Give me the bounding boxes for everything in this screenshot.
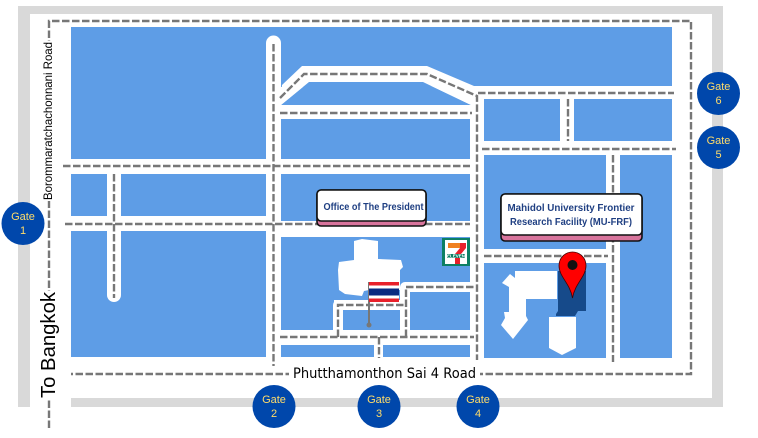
gate 3 [358,385,400,428]
label: Mahidol University Frontier Research Facility: Mahidol University Frontier [508,203,635,214]
gate 6 [697,72,740,115]
road label: Borommaratchachonnani Road: Borommaratchachonnani Road [41,42,55,200]
research facility buildings [501,271,586,355]
gate 5: Gate [707,135,730,147]
icon: 7-Eleven: ELEVEN [447,254,465,258]
gate 4 [456,385,500,428]
gate 2: Gate [262,394,286,406]
icon: location pin [559,252,586,298]
gate 6: Gate [707,81,730,93]
gate 1: 1 [20,225,26,237]
label: Office of The President: Office of The President [324,202,424,213]
label: Mahidol University Frontier Research Facility [501,194,642,241]
road label: Phutthamonthon Sai 4 Road: Phutthamonthon Sai 4 Road [293,366,476,382]
icon: Thai flag [366,282,399,328]
gate 4: Gate [466,394,490,406]
gate 3: Gate [367,394,391,406]
dashed roads [49,21,691,428]
campus blocks [71,27,672,358]
gate 1: Gate [11,211,35,223]
gate 2: 2 [271,408,277,420]
gate 2 [252,385,296,428]
gate 5: 5 [715,149,722,161]
office building footprint [338,239,403,296]
gate 6: 6 [715,95,722,107]
road label: To Bangkok: To Bangkok [38,291,60,398]
gate 1 [2,202,44,245]
gate 4: 4 [475,408,481,420]
label: Office of The President [317,190,426,226]
white internal roads [114,43,680,335]
gate 5 [697,126,740,169]
gate 3: 3 [376,408,382,420]
label: Mahidol University Frontier Research Facility: Research Facility (MU-FRF) [510,217,632,228]
icon: 7-Eleven [442,238,470,266]
